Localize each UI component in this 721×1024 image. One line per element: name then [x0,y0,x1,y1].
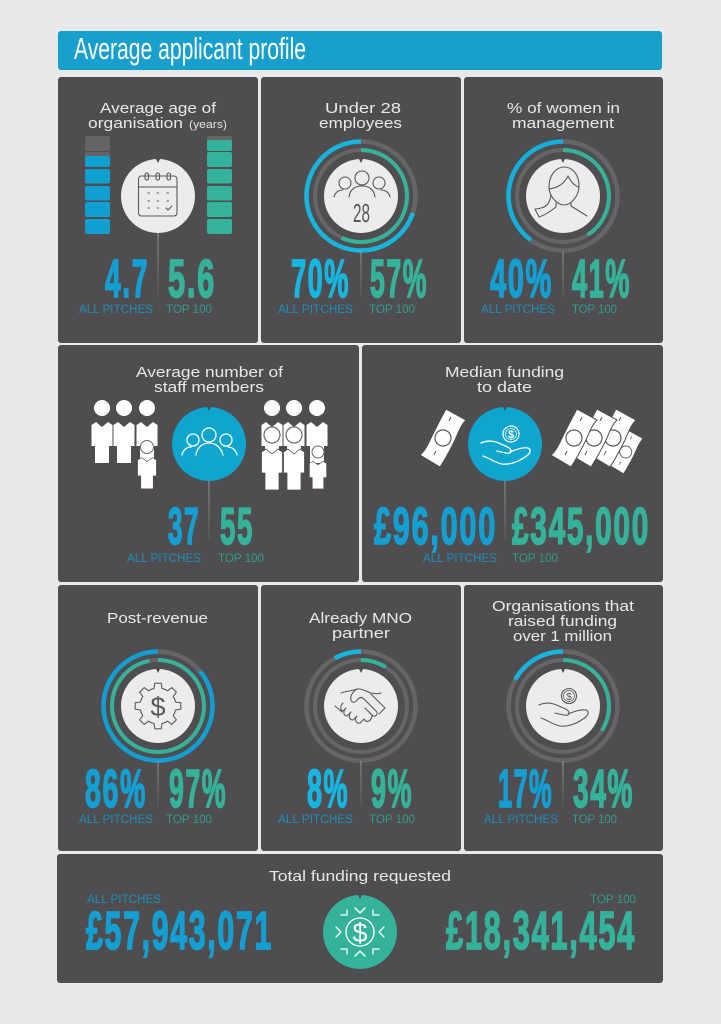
label: all pitches: ALL PITCHES [484,814,558,826]
label: all pitches: ALL PITCHES [79,304,153,316]
panel: total funding requested [57,854,663,983]
heading: women in management: management [512,115,615,132]
icon: hand with coin: $ [566,692,572,703]
label: top 100: TOP 100 [369,814,415,826]
icon: hand with coin [526,669,600,743]
label: all pitches: ALL PITCHES [481,304,555,316]
label: top 100: TOP 100 [369,304,415,316]
icon: gear with dollar [121,669,195,743]
icon: handshake [324,669,398,743]
bar gauge: top 100 [207,136,232,234]
label: all pitches: ALL PITCHES [87,894,161,906]
heading: post-revenue: Post-revenue [107,610,208,627]
heading: staff members [136,364,284,396]
icon: woman [526,159,600,233]
heading: staff members: Average number of [136,364,284,381]
label: top 100: TOP 100 [512,553,558,565]
icon: dollar burst on green circle: $ [352,918,368,948]
value: all pitches: 86% [85,759,147,819]
heading: organisations raised funding: raised funding [508,613,617,630]
heading: organisations raised funding [492,598,635,645]
title banner [58,31,662,70]
heading: under 28 [319,100,402,132]
label: top 100: TOP 100 [572,814,617,826]
panel: under 28 employees: 57% [370,249,428,309]
label: top 100: TOP 100 [590,894,636,906]
heading: average age: (years) [189,119,227,131]
heading: under 28: employees [319,115,402,132]
icon: people with 28 [324,159,398,233]
ring chart: 8% and 9% [306,652,416,760]
icon: staff figures top 100 [262,400,328,490]
panel: average age of organisation [58,77,258,343]
panel: already MNO partner: 8% [307,759,349,819]
bar gauge: all pitches [85,136,110,234]
icon: people with 28: 28 [353,198,370,228]
panel: median funding to date [362,345,663,582]
value: top 100: 41% [572,249,631,309]
icon: dollar burst on green circle [323,895,397,969]
heading: MNO partner: Already MNO [309,610,412,627]
value: top 100: 34% [573,759,634,819]
value: all pitches: 70% [291,249,350,309]
panel: post-revenue [58,585,258,851]
label: all pitches: ALL PITCHES [278,304,353,316]
heading: median funding: to date [477,379,532,396]
panel: already MNO partner: 9% [371,759,413,819]
heading: median funding [445,364,564,396]
icon: stack of banknotes [551,409,643,474]
title banner: Average applicant profile [74,31,306,66]
heading: women in management: % of women in [507,100,620,117]
heading: women in management [507,100,620,132]
heading: MNO partner: partner [332,625,390,642]
panel: post-revenue: 97% [169,759,227,819]
panel: under 28 employees [261,77,461,343]
panel: women in management [464,77,663,343]
icon: gear with dollar: $ [150,692,166,722]
label: top 100: TOP 100 [166,304,212,316]
heading: organisations raised funding: over 1 million [513,628,612,645]
value: all pitches: 40% [490,249,553,309]
value: top 100: 5.6 [168,249,216,309]
ring chart: 40% and 41% [508,142,618,250]
ring chart: 17% and 34% [508,652,618,760]
value: all pitches total: £57,943,071 [86,901,273,961]
value: all pitches: 37 [168,498,200,556]
heading: under 28: Under 28 [325,100,401,117]
icon: hand with coin on blue circle: $ [508,429,514,441]
icon: staff figures all pitches [92,400,158,489]
icon: single banknote [420,409,466,467]
icon: calendar [121,159,195,233]
panel: raised over 1 million: 17% [498,759,553,819]
label: all pitches: ALL PITCHES [423,553,497,565]
icon: people on blue circle [172,407,246,481]
heading: MNO partner [309,610,412,642]
heading: total funding: Total funding requested [269,868,451,885]
ring chart: 70% and 57% [306,142,416,250]
heading: staff members: staff members [154,379,264,396]
label: top 100: TOP 100 [218,553,264,565]
label: top 100: TOP 100 [166,814,212,826]
value: all pitches: £96,000 [374,498,497,556]
panel: average number of staff [58,345,359,582]
label: all pitches: ALL PITCHES [79,814,153,826]
value: all pitches: 4.7 [105,249,149,309]
panel: raised over 1 million [464,585,663,851]
label: top 100: TOP 100 [572,304,617,316]
heading: average age [88,100,227,132]
label: all pitches: ALL PITCHES [127,553,201,565]
ring chart: 86% and 97% [104,652,212,760]
value: top 100: 55 [220,498,254,556]
label: all pitches: ALL PITCHES [278,814,353,826]
heading: organisations raised funding: Organisations that [492,598,635,615]
icon: hand with coin on blue circle [468,407,542,481]
heading: median funding: Median funding [445,364,564,381]
heading: average age: organisation [88,115,183,132]
panel: already MNO partner [261,585,461,851]
heading: average age: Average age of [100,100,217,117]
